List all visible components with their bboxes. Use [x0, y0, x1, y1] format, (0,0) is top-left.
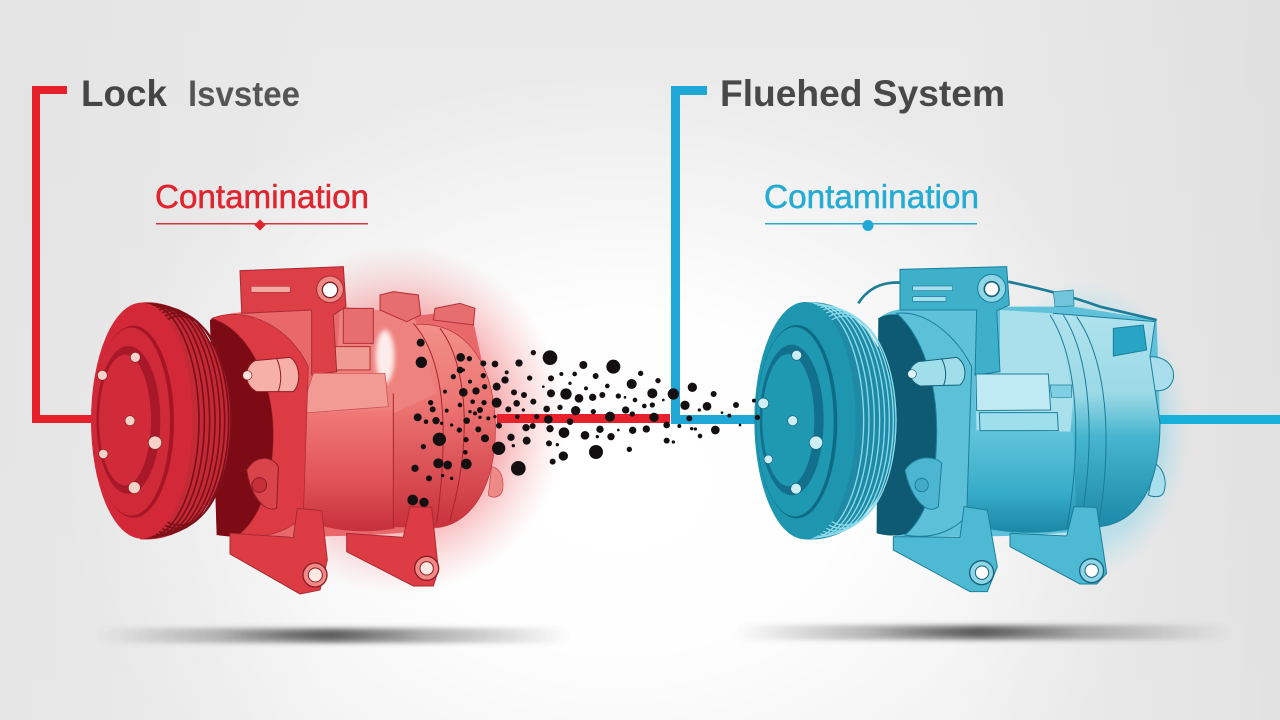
side step [1050, 385, 1072, 397]
center block [300, 373, 388, 413]
lower boss [905, 458, 942, 509]
floor shadow: left compressor [95, 628, 570, 643]
pulley inner ring [96, 346, 160, 494]
pulley face groove [93, 326, 174, 518]
mounting tab [240, 267, 346, 375]
rear housing [387, 324, 495, 527]
white highlight [376, 330, 394, 383]
red compressor [91, 267, 503, 594]
right blue bracket connector [676, 90, 760, 420]
top fittings [335, 292, 475, 370]
upper pink housing [313, 307, 437, 413]
title: left system: Lock [81, 73, 167, 114]
body silhouette [877, 307, 1160, 537]
top fitting [1053, 290, 1074, 307]
left foot [230, 508, 327, 594]
title: left garbled word: lsvstee [188, 75, 300, 114]
rear nub [488, 467, 503, 497]
label: left contamination: Contamination [155, 178, 369, 215]
pulley face [91, 303, 192, 539]
right foot hole [415, 556, 439, 580]
lower boss [247, 458, 278, 509]
rear housing [1050, 313, 1160, 527]
side boss [243, 357, 299, 392]
left foot [893, 507, 997, 592]
top pipes [858, 282, 1157, 320]
red contamination glow [235, 245, 565, 595]
label: left contamination [155, 178, 369, 231]
center block [976, 374, 1051, 411]
rear window [1113, 325, 1147, 356]
pulley inner ring [760, 345, 824, 495]
tab hole [317, 276, 343, 303]
rear bands [393, 323, 464, 527]
pulley bolts [97, 352, 162, 494]
body silhouette [210, 307, 495, 537]
left red bracket connector [36, 90, 95, 419]
front flange [212, 314, 308, 536]
dark recess [877, 314, 938, 536]
pulley face [754, 302, 856, 539]
main cylinder [298, 410, 395, 531]
title: right system: Fluehed System [720, 73, 1005, 114]
side boss [908, 357, 965, 386]
blue clean glow [980, 280, 1190, 580]
right foot [347, 507, 438, 586]
right foot hole [1080, 559, 1104, 583]
right nubs [1148, 357, 1174, 497]
pulley ribs [96, 302, 232, 540]
tab slit [251, 286, 290, 292]
pulley ribs [760, 302, 897, 540]
left foot hole [303, 563, 327, 587]
tab slits [913, 286, 953, 301]
pulley face groove [756, 325, 837, 518]
front flange [897, 313, 972, 536]
dark recess [210, 315, 278, 536]
pulley bolts [758, 350, 823, 494]
mounting tab [900, 267, 1009, 375]
label: right contamination [764, 178, 979, 231]
left foot hole [970, 561, 994, 585]
right foot [1010, 507, 1107, 584]
red contaminated flow line [497, 414, 670, 423]
tab hole [978, 274, 1006, 302]
upper housing [975, 310, 1073, 437]
blue compressor [754, 267, 1174, 592]
label: right contamination: Contamination [764, 178, 979, 215]
right blue output line [1150, 415, 1280, 424]
contamination particles [407, 339, 760, 507]
floor shadow: right compressor [735, 625, 1230, 640]
main cylinder [957, 430, 1077, 533]
center plate [979, 413, 1058, 431]
rear bands [1050, 315, 1106, 528]
